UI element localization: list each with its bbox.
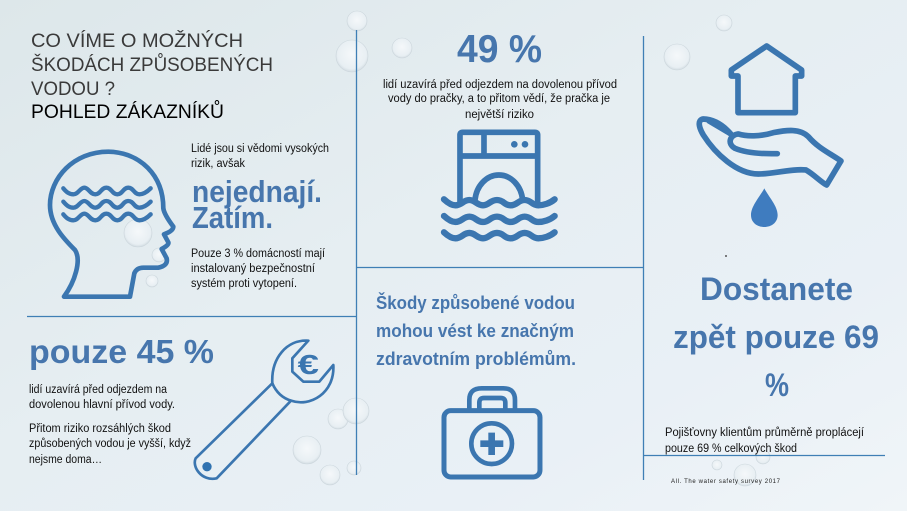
text: main valve: Přitom riziko rozsáhlých škod bbox=[29, 423, 171, 435]
title: CO VÍME O MOŽNÝCH bbox=[31, 30, 243, 52]
text: safety system: Pouze 3 % domácností mají bbox=[191, 248, 326, 260]
icon: flooded washing machine bbox=[444, 132, 555, 238]
text: insurance payout: pouze 69 % celkových škod bbox=[665, 443, 797, 455]
heading: Dostanete zpět pouze 69 %: zpět pouze 69 bbox=[673, 319, 879, 355]
text: washing machine valve bbox=[383, 79, 617, 121]
heading: Dostanete zpět pouze 69 % bbox=[673, 271, 879, 403]
water droplets bbox=[124, 11, 770, 486]
icon: wrench with euro bbox=[195, 341, 333, 479]
heading: health problems: zdravotním problémům. bbox=[376, 349, 576, 369]
heading: nejednají: Zatím. bbox=[192, 200, 273, 235]
source note: All. The water safety survey 2017 bbox=[671, 479, 781, 485]
text: awareness: rizik, avšak bbox=[191, 158, 245, 170]
text: awareness bbox=[191, 143, 329, 170]
text: main valve: dovolenou hlavní přívod vody. bbox=[29, 399, 175, 411]
heading: nejednají: nejednají. bbox=[192, 174, 322, 209]
text: washing machine valve: největší riziko bbox=[465, 109, 534, 121]
title: ŠKODÁCH ZPŮSOBENÝCH bbox=[31, 54, 273, 76]
text: main valve: lidí uzavírá před odjezdem na bbox=[29, 384, 168, 396]
text: main valve bbox=[29, 384, 191, 466]
text: main valve: nejsme doma… bbox=[29, 454, 102, 466]
title: VODOU ? bbox=[31, 79, 115, 100]
title bbox=[31, 30, 273, 123]
heading: 49 %: 49 % bbox=[457, 28, 542, 71]
heading: health problems: Škody způsobené vodou bbox=[376, 292, 575, 313]
text: insurance payout bbox=[665, 427, 865, 455]
text: main valve: způsobených vodou je vyšší, když bbox=[29, 438, 191, 450]
icon: house on hand with water drop bbox=[699, 46, 841, 227]
text: safety system: instalovaný bezpečnostní bbox=[191, 263, 316, 275]
text: washing machine valve: lidí uzavírá před odjezdem na dovolenou přívod bbox=[383, 79, 617, 91]
heading: Dostanete zpět pouze 69 %: % bbox=[765, 367, 789, 403]
text: insurance payout: Pojišťovny klientům průměrně proplácejí bbox=[665, 427, 865, 439]
text: safety system bbox=[191, 248, 326, 290]
text: safety system: systém proti vytopení. bbox=[191, 278, 297, 290]
heading: Dostanete zpět pouze 69 %: Dostanete bbox=[700, 271, 853, 307]
title: POHLED ZÁKAZNÍKŮ bbox=[31, 101, 224, 123]
icon: head with waves bbox=[50, 152, 173, 297]
text: washing machine valve: vody do pračky, a to přitom vědí, že pračka je bbox=[388, 93, 610, 105]
small dot bbox=[725, 255, 727, 257]
heading: health problems: mohou vést ke značným bbox=[376, 321, 574, 341]
heading: nejednají bbox=[192, 174, 322, 235]
icon: wrench with euro: € bbox=[298, 349, 320, 380]
heading: health problems bbox=[376, 292, 576, 369]
heading: pouze 45 %: pouze 45 % bbox=[29, 333, 214, 370]
icon: first aid kit bbox=[444, 388, 540, 477]
text: awareness: Lidé jsou si vědomi vysokých bbox=[191, 143, 329, 155]
